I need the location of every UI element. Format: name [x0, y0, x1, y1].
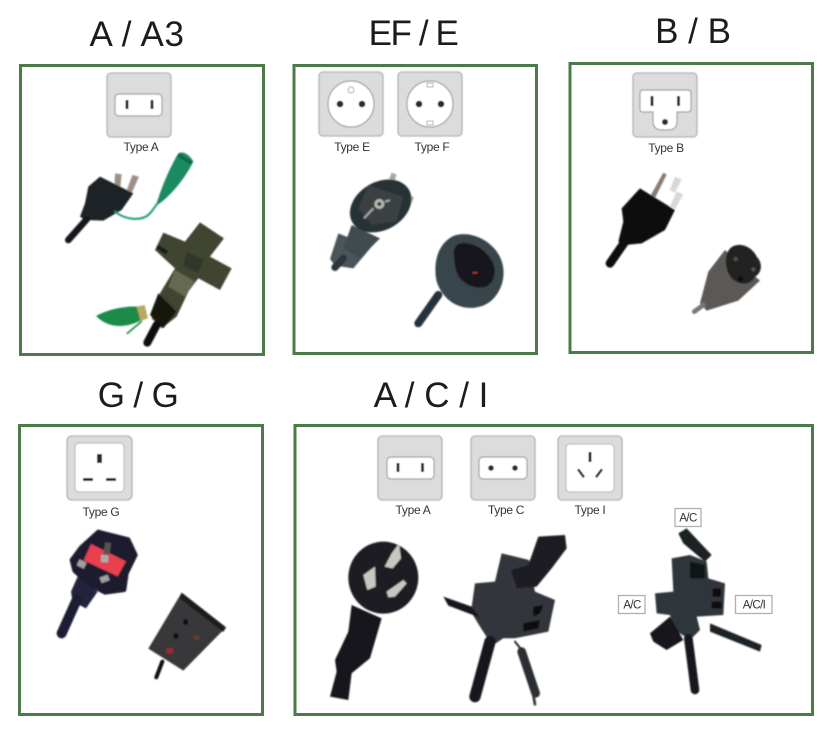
title: EF / E: EF / E	[369, 14, 457, 53]
title: B / B: B / B	[655, 12, 731, 51]
tag: A/C left	[618, 596, 645, 614]
title: G / G: G / G	[98, 376, 178, 415]
plug: olive three-way tap with green tag	[96, 222, 232, 343]
panel: A / A3	[20, 66, 264, 354]
plug: UK trailing socket	[148, 593, 226, 677]
panel: A / C / I	[295, 426, 812, 714]
label: Type A: Type A	[124, 140, 159, 154]
icon: Type I socket	[558, 436, 622, 500]
icon: Type B socket	[633, 73, 697, 137]
panel: B / B	[570, 64, 812, 352]
label: Type G: Type G	[83, 505, 119, 519]
plug: multi-way adapter	[443, 535, 567, 704]
label: Type F: Type F	[415, 140, 449, 154]
tag: A/C top	[675, 508, 701, 526]
plug: Type I plug	[330, 542, 418, 700]
icon: Type A socket	[107, 73, 171, 137]
label: Type B: Type B	[648, 141, 684, 155]
plug: black Type B plug	[610, 173, 683, 263]
tag: A/C top: A/C	[679, 512, 697, 524]
icon: Type F socket	[398, 72, 462, 136]
panel: EF / E	[294, 66, 536, 354]
plug: adapter diagram with labels	[618, 508, 772, 690]
tag: A/C left: A/C	[623, 600, 641, 612]
plug: grey Type B socket	[694, 245, 761, 312]
plug: black Type A plug with green earth clip	[68, 153, 193, 240]
plug: Schuko plug	[330, 169, 421, 268]
icon: Type G socket	[67, 436, 132, 500]
icon: Type E socket	[319, 72, 383, 136]
icon: Type A socket	[378, 436, 442, 500]
adapter illustration	[650, 528, 762, 690]
label: Type I: Type I	[575, 503, 605, 517]
plug: UK Type G plug	[62, 532, 136, 633]
title: A / C / I: A / C / I	[374, 376, 488, 415]
label: Type A: Type A	[396, 503, 431, 517]
icon: Type C socket	[471, 436, 535, 500]
panel: G / G	[20, 426, 262, 714]
title: A / A3: A / A3	[89, 15, 185, 54]
tag: A/C/I right: A/C/I	[743, 600, 766, 612]
tag: A/C/I right	[736, 596, 772, 614]
label: Type E: Type E	[334, 140, 370, 154]
plug: Schuko socket	[418, 234, 504, 323]
label: Type C: Type C	[488, 503, 525, 517]
